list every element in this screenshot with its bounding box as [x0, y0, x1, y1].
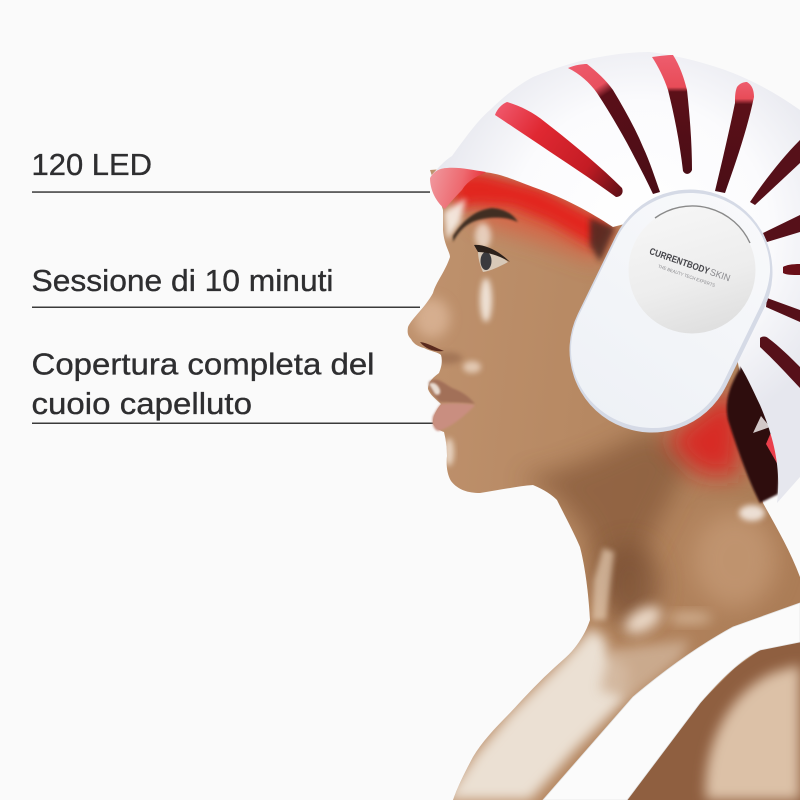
hair at nape	[727, 365, 782, 503]
red glow: behind ear	[665, 392, 742, 475]
jaw shadow	[527, 430, 690, 586]
forehead highlight	[444, 198, 466, 240]
LED slot 2	[568, 64, 660, 194]
lips	[429, 380, 475, 431]
red visor under brim	[430, 168, 486, 209]
logo: SKIN	[708, 267, 732, 284]
LED slot 9	[760, 336, 800, 388]
chin highlight	[444, 438, 454, 466]
LED slot 6	[763, 215, 800, 242]
temple hair	[590, 218, 615, 262]
neck tendon highlight	[592, 548, 614, 620]
nose light	[414, 298, 450, 338]
logo	[645, 246, 732, 292]
feature: full scalp coverage	[32, 346, 433, 424]
collarbone highlight	[620, 600, 666, 640]
shoulder	[627, 642, 800, 800]
plate edge	[652, 272, 690, 350]
white tank top strap	[543, 603, 800, 800]
LED slot 4	[715, 82, 754, 193]
chest tone near strap	[600, 640, 690, 700]
LED helmet device	[430, 52, 800, 503]
nostril	[420, 342, 444, 351]
LED slot 3	[652, 55, 692, 174]
red glow in hair	[766, 430, 778, 465]
skin silhouette: face, neck and chest	[400, 150, 800, 800]
red glow: forehead	[452, 172, 612, 248]
chest highlight	[445, 628, 630, 800]
logo: CURRENTBODY	[648, 246, 711, 277]
feature list	[32, 147, 433, 424]
LED slot 1	[495, 102, 623, 197]
brow bone highlight	[475, 223, 491, 249]
feature: full scalp coverage: Copertura completa del	[32, 346, 374, 382]
feature: 10 minute session: Sessione di 10 minuti	[32, 263, 334, 298]
plate face	[571, 193, 770, 428]
feature: full scalp coverage: cuoio capelluto	[32, 386, 252, 421]
neck back highlight	[739, 505, 765, 521]
upper lip highlight	[463, 361, 481, 373]
cheek highlight	[480, 278, 492, 322]
eye	[474, 245, 510, 272]
helmet shell	[430, 52, 800, 503]
control disc	[628, 206, 756, 334]
under-nose and mouth shading	[434, 352, 462, 364]
feature: 120 LED: 120 LED	[32, 147, 152, 182]
LED slot 8	[766, 298, 800, 322]
model in profile	[400, 150, 800, 800]
LED slot 5	[750, 140, 800, 205]
logo: THE BEAUTY TECH EXPERTS	[657, 264, 716, 288]
soft orange falloff of forehead glow	[460, 190, 612, 262]
LED slot 7	[783, 264, 800, 275]
eyebrow	[453, 208, 518, 242]
hair light glint	[753, 416, 770, 433]
ear plate	[571, 193, 770, 428]
neck central shadow	[600, 543, 660, 627]
back of neck light	[693, 512, 777, 608]
